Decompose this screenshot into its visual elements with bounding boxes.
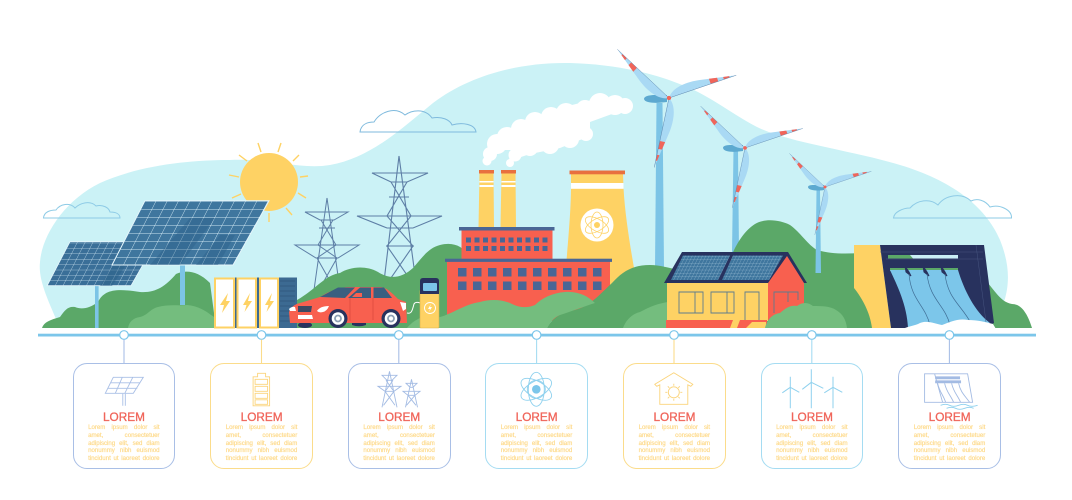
body text: Lorem ipsum dolor sit xyxy=(639,424,710,431)
bush left xyxy=(128,305,220,328)
card: nuclear xyxy=(485,363,588,469)
body text: adipiscing elit, sed diam xyxy=(776,440,848,447)
wind rotor 1 xyxy=(611,48,737,169)
icon: house with sun xyxy=(654,372,694,405)
chimneys xyxy=(478,170,516,227)
body text: amet, consectetuer xyxy=(363,432,435,439)
icon: battery xyxy=(252,372,270,406)
body text: nonummy nibh euismod xyxy=(88,447,160,454)
connector lines xyxy=(124,340,949,363)
body text xyxy=(500,424,572,462)
body text xyxy=(638,424,710,462)
electric car xyxy=(289,287,407,328)
wind rotor 3 xyxy=(785,152,872,236)
body text: nonummy nibh euismod xyxy=(776,447,848,454)
smoke xyxy=(482,93,633,167)
wind rotor 2 xyxy=(696,105,803,209)
body text: tincidunt ut laoreet dolore xyxy=(363,455,435,462)
battery bank xyxy=(215,278,297,328)
large solar panel xyxy=(112,201,269,305)
card: solar home xyxy=(623,363,726,469)
title: LOREM xyxy=(103,410,145,424)
factory lower block xyxy=(445,259,612,321)
dam right hill xyxy=(985,280,1032,328)
hill behind house left xyxy=(547,265,680,328)
body text: adipiscing elit, sed diam xyxy=(226,440,297,447)
timeline nodes xyxy=(120,331,954,339)
body text: adipiscing elit, sed diam xyxy=(88,440,160,447)
body text: amet, consectetuer xyxy=(226,432,297,439)
wind turbine 3 tower xyxy=(808,185,824,273)
small solar panel xyxy=(47,242,156,328)
body text: adipiscing elit, sed diam xyxy=(639,440,710,447)
charging cable xyxy=(407,302,420,313)
body text: tincidunt ut laoreet dolore xyxy=(776,455,848,462)
body text: tincidunt ut laoreet dolore xyxy=(226,455,297,462)
card: battery xyxy=(210,363,313,469)
body text: amet, consectetuer xyxy=(501,432,572,439)
icon: solar panel xyxy=(104,376,144,406)
body text: adipiscing elit, sed diam xyxy=(914,440,985,447)
cloud centre xyxy=(360,111,476,132)
pylon small xyxy=(295,198,359,297)
title: LOREM xyxy=(929,410,971,424)
body text: nonummy nibh euismod xyxy=(501,447,572,454)
pylon large xyxy=(357,156,442,290)
card: solar xyxy=(73,363,175,469)
sun xyxy=(229,143,308,222)
hill light front of factory xyxy=(407,292,595,328)
title: LOREM xyxy=(516,410,558,424)
body text: nonummy nibh euismod xyxy=(226,447,297,454)
title: LOREM xyxy=(378,410,420,424)
body text xyxy=(776,424,848,462)
body text xyxy=(363,424,435,462)
body text: nonummy nibh euismod xyxy=(914,447,985,454)
icon: dam xyxy=(924,373,978,410)
body text: tincidunt ut laoreet dolore xyxy=(88,455,160,462)
hill beneath car xyxy=(407,318,420,328)
body text: Lorem ipsum dolor sit xyxy=(363,424,435,431)
hill behind house right xyxy=(730,220,880,328)
factory upper block xyxy=(459,227,554,259)
title: LOREM xyxy=(241,410,283,424)
body text: nonummy nibh euismod xyxy=(363,447,435,454)
cloud right xyxy=(894,196,1012,218)
hill left xyxy=(42,272,216,328)
hills back left xyxy=(297,244,470,328)
timeline axis xyxy=(38,334,1036,336)
body text: amet, consectetuer xyxy=(776,432,848,439)
body text: tincidunt ut laoreet dolore xyxy=(914,455,985,462)
wind turbine 1 tower xyxy=(644,95,667,268)
sky blob xyxy=(40,63,1008,328)
body text: nonummy nibh euismod xyxy=(639,447,710,454)
body text xyxy=(88,424,160,462)
body text: tincidunt ut laoreet dolore xyxy=(501,455,572,462)
card: wind xyxy=(761,363,863,469)
charging station xyxy=(420,278,439,328)
hill light right of factory xyxy=(623,302,680,328)
icon: wind turbines xyxy=(782,369,842,408)
wind turbine 2 tower xyxy=(723,145,743,252)
hydro dam xyxy=(854,245,996,329)
body text: amet, consectetuer xyxy=(88,432,160,439)
body text: amet, consectetuer xyxy=(639,432,710,439)
body text: Lorem ipsum dolor sit xyxy=(776,424,848,431)
cloud left xyxy=(44,203,120,218)
body text xyxy=(226,424,298,462)
icon: pylons xyxy=(376,371,422,408)
body text: Lorem ipsum dolor sit xyxy=(501,424,572,431)
bush by house xyxy=(765,303,847,328)
icon: atom xyxy=(520,372,552,407)
house xyxy=(664,252,807,328)
card: hydro xyxy=(898,363,1001,469)
title: LOREM xyxy=(791,410,833,424)
body text: tincidunt ut laoreet dolore xyxy=(639,455,710,462)
card: power lines xyxy=(348,363,450,469)
body text: amet, consectetuer xyxy=(914,432,985,439)
body text: adipiscing elit, sed diam xyxy=(501,440,572,447)
body text: Lorem ipsum dolor sit xyxy=(88,424,160,431)
cooling tower xyxy=(563,170,634,300)
title: LOREM xyxy=(653,410,695,424)
body text: Lorem ipsum dolor sit xyxy=(226,424,297,431)
body text xyxy=(914,424,986,462)
body text: adipiscing elit, sed diam xyxy=(363,440,435,447)
body text: Lorem ipsum dolor sit xyxy=(914,424,985,431)
